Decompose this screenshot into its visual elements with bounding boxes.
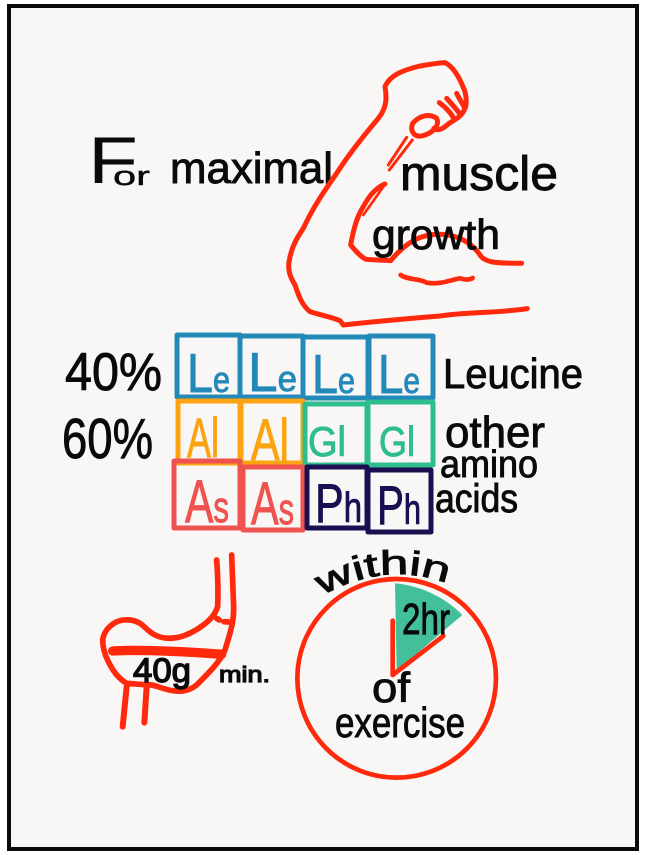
- heading: for maximal: F: [88, 123, 138, 197]
- row: alanine and glycine tiles: Gl: [379, 418, 415, 465]
- label: other amino acids: [435, 408, 545, 521]
- clock hands: [393, 621, 443, 675]
- label: within: within: [313, 550, 448, 593]
- row: aspartate and phenylalanine tiles: As: [251, 470, 294, 537]
- heading: for maximal: maximal: [170, 144, 333, 193]
- clock face: [297, 579, 496, 778]
- label: 2hr: 2hr: [402, 595, 450, 644]
- row: alanine and glycine tiles: Al: [251, 408, 289, 473]
- heading: muscle: muscle: [400, 148, 558, 201]
- row: alanine and glycine tiles: Al: [187, 406, 219, 469]
- heading: for maximal: [88, 123, 333, 197]
- row: aspartate and phenylalanine tiles: Ph: [377, 474, 421, 536]
- label: of: of: [372, 664, 410, 711]
- label: exercise: exercise: [335, 699, 465, 746]
- row: aspartate and phenylalanine tiles: As: [185, 468, 229, 535]
- row: leucine tiles: Le: [312, 343, 355, 405]
- icon: flexed arm: [289, 63, 527, 325]
- heading: growth: growth: [372, 211, 500, 258]
- row: aspartate and phenylalanine tiles: [174, 461, 431, 537]
- row: alanine and glycine tiles: Gl: [308, 418, 346, 465]
- label: other amino acids: amino: [440, 444, 538, 486]
- row: leucine tiles: [177, 335, 433, 405]
- label: 40g: 40g: [133, 652, 191, 690]
- clock wedge: two hours: [395, 583, 462, 671]
- label: leucine: Leucine: [443, 350, 583, 397]
- curve for within label: [322, 574, 449, 596]
- label: 60 percent: 60%: [62, 407, 153, 471]
- amino acid composition grid: [174, 335, 433, 537]
- label: min.: min.: [219, 662, 270, 687]
- icon: clock: [297, 579, 496, 778]
- label: other amino acids: other: [445, 408, 545, 457]
- heading: for maximal: or: [113, 161, 150, 191]
- row: aspartate and phenylalanine tiles: Ph: [315, 472, 362, 534]
- row: alanine and glycine tiles: [178, 401, 433, 473]
- row: leucine tiles: Le: [187, 342, 230, 404]
- icon: stomach: [103, 555, 234, 727]
- label: other amino acids: acids: [435, 477, 518, 521]
- row: leucine tiles: Le: [248, 341, 297, 403]
- row: leucine tiles: Le: [378, 343, 420, 405]
- label: 40 percent: 40%: [65, 343, 162, 402]
